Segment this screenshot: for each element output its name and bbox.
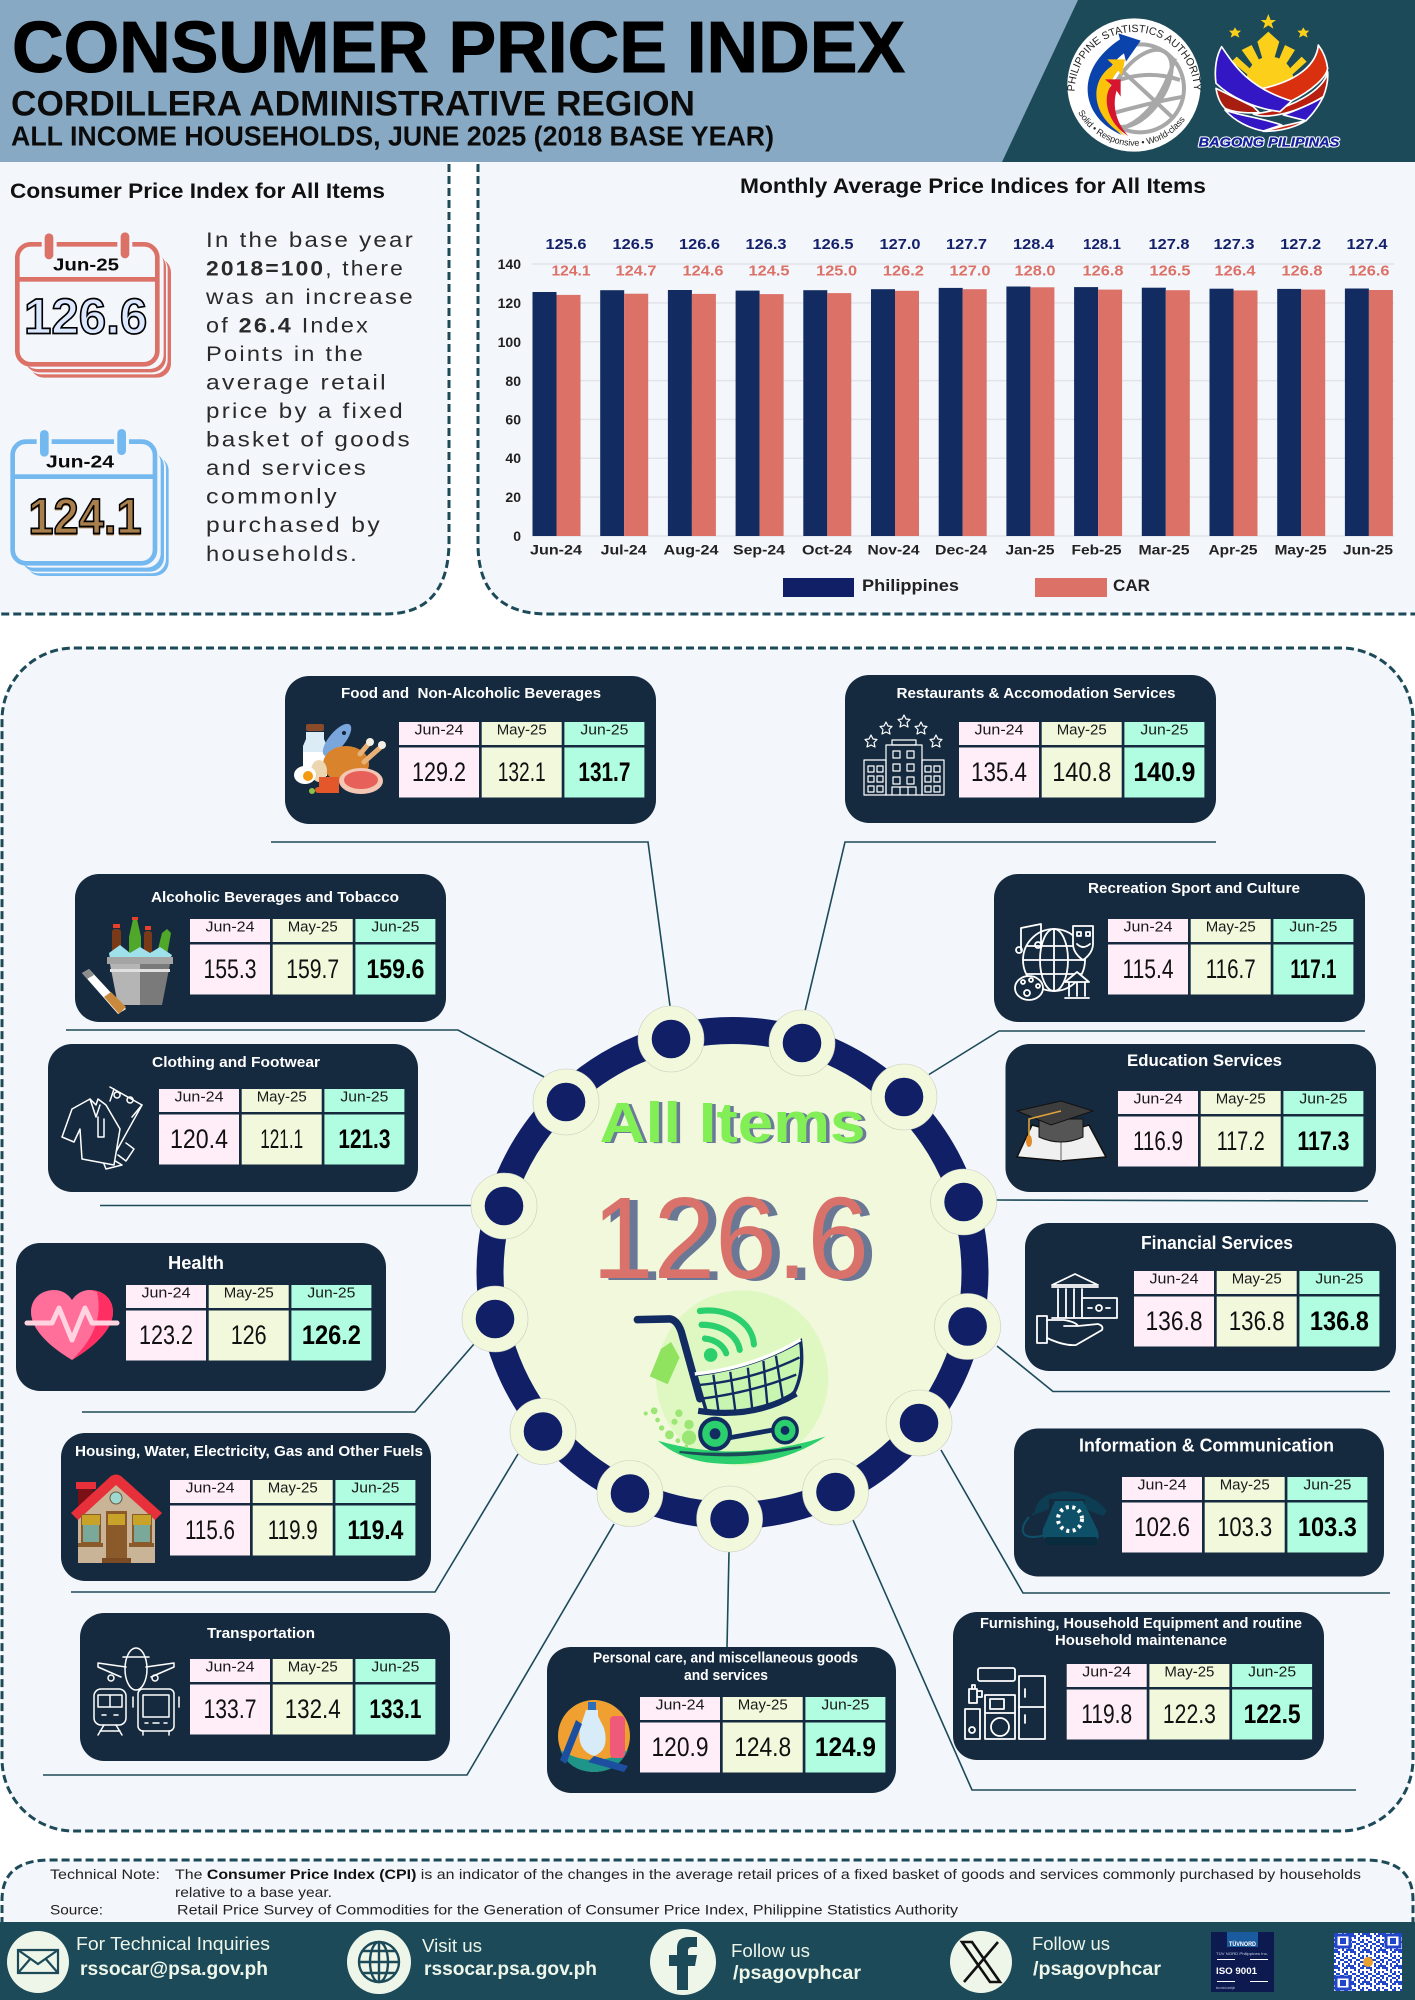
icon: bottles and cigarette xyxy=(82,917,173,1014)
panel: monthly average price indices xyxy=(478,162,1415,614)
technical note text: The Consumer Price Index (CPI) is an indicator of the changes in the average retail prices of a fixed basket of goods and services commonly purchased by households xyxy=(175,1866,1361,1882)
card title: Alcoholic Beverages and Tobacco xyxy=(151,889,399,906)
technical note text: relative to a base year. xyxy=(175,1884,332,1900)
icon: bank and hand xyxy=(1037,1274,1117,1345)
contact: X: Follow us xyxy=(1032,1934,1110,1954)
bar chart: 126.6 xyxy=(679,236,720,253)
data table: 133.1 xyxy=(369,1694,421,1724)
bar chart: Jun-25 xyxy=(1343,542,1393,558)
data table: 159.7 xyxy=(286,954,339,984)
data table: 126 xyxy=(231,1320,267,1350)
icon: calendar Jun-24: Jun-24 xyxy=(46,451,114,471)
data table: 136.8 xyxy=(1146,1306,1202,1336)
bar chart: 127.3 xyxy=(1214,236,1254,253)
data table: May-25 xyxy=(1206,918,1256,936)
data table: 136.8 xyxy=(1229,1306,1285,1336)
data table: 140.9 xyxy=(1133,757,1195,787)
footer bar xyxy=(0,1922,1415,2000)
logo: Bagong Pilipinas xyxy=(1199,14,1339,150)
bar chart: 127.8 xyxy=(1148,236,1190,253)
badge: ISO 9001 xyxy=(1211,1932,1274,1992)
text block: base year explanation: purchased by xyxy=(206,514,382,537)
data table: May-25 xyxy=(288,918,338,936)
data table: Jun-24 xyxy=(1138,1476,1186,1494)
data table: Jun-24 xyxy=(1124,918,1172,936)
contact: technical inquiries: For Technical Inquiries xyxy=(76,1934,270,1954)
chart legend: CAR xyxy=(1113,576,1150,595)
data table: 132.1 xyxy=(498,757,546,787)
data table: 119.4 xyxy=(347,1515,403,1545)
bar chart: 124.7 xyxy=(616,262,656,280)
icon: calendar Jun-24 xyxy=(13,429,169,576)
data table: Jun-25 xyxy=(1140,722,1188,738)
contact: X: /psagovphcar xyxy=(1033,1959,1162,1980)
panel: consumer price index for all items xyxy=(0,162,449,614)
bar chart: 124.6 xyxy=(682,262,724,280)
data table: 121.1 xyxy=(260,1124,303,1154)
bar chart: 80 xyxy=(505,373,521,389)
data table: 136.8 xyxy=(1310,1306,1369,1336)
data table: 122.3 xyxy=(1163,1699,1216,1729)
data table: May-25 xyxy=(1216,1090,1266,1108)
card: transportation xyxy=(80,1613,450,1761)
logo: Bagong Pilipinas: BAGONG PILIPINAS xyxy=(1199,135,1339,150)
data table: Jun-24 xyxy=(206,1658,254,1676)
heading: all items: All Items xyxy=(603,1092,869,1156)
data table: May-25 xyxy=(1164,1664,1214,1680)
data table: May-25 xyxy=(288,1658,338,1676)
technical note text: Technical Note: xyxy=(50,1866,160,1882)
icon: shopping cart xyxy=(637,1290,828,1466)
contact: website: Visit us xyxy=(422,1936,482,1956)
data table: May-25 xyxy=(1232,1270,1282,1288)
source text: Retail Price Survey of Commodities for the Generation of Consumer Price Index, Philippine Statistics Authority xyxy=(177,1902,958,1918)
data table: 116.7 xyxy=(1206,954,1256,984)
bar chart: 125.6 xyxy=(546,236,586,253)
data table: May-25 xyxy=(738,1696,788,1714)
card title: Transportation xyxy=(207,1625,315,1642)
bar chart: 127.2 xyxy=(1280,236,1321,253)
contact: facebook: Follow us xyxy=(731,1941,810,1961)
data table: Jun-24 xyxy=(174,1088,224,1106)
card title xyxy=(593,1650,858,1684)
card title: Restaurants & Accomodation Services xyxy=(896,685,1176,702)
bar chart: 128.4 xyxy=(1013,236,1055,253)
data table: 119.8 xyxy=(1081,1699,1132,1729)
card: health xyxy=(16,1243,386,1391)
data table: 123.2 xyxy=(139,1320,193,1350)
bar chart: Mar-25 xyxy=(1138,542,1190,558)
data table: May-25 xyxy=(257,1088,307,1106)
data table: Jun-25 xyxy=(580,722,628,738)
icon: rotary telephone xyxy=(1023,1491,1107,1545)
bar chart: Aug-24 xyxy=(664,542,719,558)
icon: personal care xyxy=(558,1700,630,1772)
data table: 124.8 xyxy=(734,1732,791,1762)
bar chart: 126.6 xyxy=(1348,262,1390,280)
subtitle: households and period: ALL INCOME HOUSEHOLDS, JUNE 2025 (2018 BASE YEAR) xyxy=(11,120,774,152)
data table: 119.9 xyxy=(268,1515,318,1545)
data table xyxy=(1108,918,1353,994)
icon: graduation cap on book xyxy=(1017,1101,1106,1161)
data table: 129.2 xyxy=(412,757,466,787)
contact: facebook xyxy=(650,1929,862,1995)
contact: X xyxy=(950,1931,1162,1993)
logo: Philippine Statistics Authority xyxy=(1067,18,1202,152)
card title: Health xyxy=(168,1253,224,1273)
data table xyxy=(170,1480,415,1556)
data table: Jun-25 xyxy=(1303,1476,1351,1494)
bar chart xyxy=(498,236,1394,558)
data table xyxy=(640,1696,885,1772)
bar chart: 127.0 xyxy=(950,262,990,280)
data table xyxy=(159,1088,404,1164)
data table: Jun-25 xyxy=(1299,1090,1347,1108)
data table: Jun-25 xyxy=(821,1696,869,1714)
text block: base year explanation: Points in the xyxy=(206,343,365,366)
card title: Recreation Sport and Culture xyxy=(1088,880,1300,897)
logo: Bagong Pilipinas: BAGONG PILIPINAS xyxy=(1199,135,1339,150)
data table: Jun-24 xyxy=(186,1480,234,1496)
bar chart: Sep-24 xyxy=(733,542,785,558)
card: financial services xyxy=(1025,1223,1396,1371)
card: information and communication xyxy=(1014,1428,1384,1576)
contact: technical inquiries xyxy=(7,1931,270,1993)
text block: base year explanation xyxy=(205,229,415,566)
text block: base year explanation: In the base year xyxy=(206,229,415,252)
card title xyxy=(980,1615,1302,1649)
bar chart: Feb-25 xyxy=(1072,542,1122,558)
data table: May-25 xyxy=(1220,1476,1270,1494)
badge: ISO 9001: ISO 9001 xyxy=(1216,1966,1257,1976)
logo: Philippine Statistics Authority: PHILIPPINE STATISTICS AUTHORITY xyxy=(1067,24,1202,91)
data table xyxy=(399,722,644,798)
data table xyxy=(126,1284,371,1360)
header banner xyxy=(0,0,1415,162)
headline value: 126.6 xyxy=(600,1175,877,1305)
data table: Jun-25 xyxy=(371,1658,419,1676)
data table: May-25 xyxy=(497,722,547,738)
card title: Information & Communication xyxy=(1079,1436,1334,1456)
data table: Jun-24 xyxy=(142,1284,190,1302)
text block: base year explanation: price by a fixed xyxy=(206,400,405,423)
text block: base year explanation: average retail xyxy=(206,372,388,394)
data table: 117.1 xyxy=(1290,954,1336,984)
data table xyxy=(190,918,435,994)
data table: Jun-24 xyxy=(974,722,1024,738)
data table xyxy=(959,722,1204,798)
icon: calendar Jun-25 xyxy=(17,232,171,378)
data table: 120.9 xyxy=(652,1732,708,1762)
card: education services xyxy=(1006,1044,1376,1192)
badge: ISO 9001: TÜVNORD xyxy=(1229,1941,1257,1948)
card: food and non-alcoholic beverages xyxy=(285,676,656,824)
bar chart: 40 xyxy=(505,450,521,466)
data table xyxy=(1134,1270,1379,1346)
data table: 117.3 xyxy=(1297,1126,1349,1156)
bar chart: 60 xyxy=(505,412,521,428)
bar chart: 127.4 xyxy=(1346,236,1388,253)
bar chart: 126.5 xyxy=(812,236,854,253)
data table: Jun-25 xyxy=(371,918,419,936)
icon: calendar Jun-24: 124.1 xyxy=(28,490,142,546)
data table: Jun-24 xyxy=(1150,1270,1198,1288)
bar chart: 126.4 xyxy=(1214,262,1256,280)
heading: consumer price index for all items: Consumer Price Index for All Items xyxy=(10,180,385,203)
bar chart: Jun-24 xyxy=(530,542,582,558)
card title: Financial Services xyxy=(1141,1233,1293,1253)
bar chart: Jul-24 xyxy=(601,542,647,558)
data table: 140.8 xyxy=(1052,757,1111,787)
card title: Household maintenance xyxy=(1055,1632,1227,1649)
data table: Jun-25 xyxy=(340,1088,388,1106)
card title: Furnishing, Household Equipment and routine xyxy=(980,1615,1302,1632)
bar chart: 126.2 xyxy=(883,262,924,280)
text block: base year explanation: basket of goods xyxy=(206,428,412,452)
card: clothing and footwear xyxy=(48,1044,418,1192)
bar chart: Nov-24 xyxy=(868,542,920,558)
icon: plane, train, bus xyxy=(94,1648,179,1735)
data table: Jun-24 xyxy=(656,1696,704,1714)
bar chart: 0 xyxy=(513,528,521,544)
connector lines xyxy=(43,842,1390,1790)
data table: Jun-24 xyxy=(206,918,254,936)
data table: 116.9 xyxy=(1133,1126,1183,1156)
data table: May-25 xyxy=(1057,722,1107,738)
data table: Jun-24 xyxy=(1134,1090,1182,1108)
panel: technical note xyxy=(2,1860,1413,1925)
data table: Jun-25 xyxy=(1315,1270,1363,1288)
data table: Jun-25 xyxy=(1289,918,1337,936)
data table xyxy=(1118,1090,1363,1166)
text block: base year explanation: and services xyxy=(206,457,368,480)
data table: 132.4 xyxy=(285,1694,341,1724)
card: alcoholic beverages and tobacco xyxy=(75,874,446,1022)
icon: clothes xyxy=(62,1087,142,1169)
icon: food xyxy=(294,720,386,794)
chart legend xyxy=(783,576,1150,597)
bar chart: 128.1 xyxy=(1083,236,1121,253)
bar chart: Oct-24 xyxy=(802,542,852,558)
data table: 131.7 xyxy=(578,757,630,787)
contact: website: rssocar.psa.gov.ph xyxy=(424,1959,597,1980)
card: furnishing, household equipment and routine household maintenance xyxy=(953,1612,1324,1760)
logo: Philippine Statistics Authority: Solid • Responsive • World-class xyxy=(1078,110,1184,146)
data table: Jun-25 xyxy=(351,1480,399,1496)
data table xyxy=(190,1658,435,1734)
bar chart: 124.1 xyxy=(552,262,590,280)
data table: 124.9 xyxy=(815,1732,876,1762)
data table: May-25 xyxy=(268,1480,318,1496)
card title: Clothing and Footwear xyxy=(152,1054,320,1071)
data table: 102.6 xyxy=(1134,1512,1190,1542)
bar chart: 126.3 xyxy=(746,236,786,253)
text block: base year explanation: was an increase xyxy=(205,286,415,309)
bar chart: 126.8 xyxy=(1082,262,1124,280)
data table: May-25 xyxy=(224,1284,274,1302)
badge: ISO 9001: TÜV NORD Philippines Inc. xyxy=(1216,1951,1268,1956)
card title: Food and Non-Alcoholic Beverages xyxy=(341,685,601,702)
card title: and services xyxy=(684,1667,768,1684)
data table: 159.6 xyxy=(366,954,424,984)
icon: appliances xyxy=(965,1668,1045,1739)
title: CONSUMER PRICE INDEX xyxy=(12,8,905,88)
data table xyxy=(1122,1476,1367,1552)
badge: ISO 9001: tuv-nord.com/ph xyxy=(1216,1986,1235,1990)
text block: base year explanation: commonly xyxy=(206,486,339,508)
bar chart: 124.5 xyxy=(748,262,790,280)
bar chart: 128.0 xyxy=(1014,262,1056,280)
data table: Jun-25 xyxy=(307,1284,355,1302)
panel: commodity groups xyxy=(2,648,1413,1831)
icon: recreation xyxy=(1015,924,1093,1000)
icon: calendar Jun-25: 126.6 xyxy=(24,288,147,344)
text block: base year explanation: of 26.4 Index xyxy=(206,314,370,338)
bar chart: 126.8 xyxy=(1282,262,1322,280)
icon: calendar Jun-25: Jun-25 xyxy=(53,254,119,274)
data table xyxy=(1067,1664,1312,1740)
card: recreation sport and culture xyxy=(994,874,1365,1022)
source text: Source: xyxy=(50,1902,103,1918)
subtitle: region: CORDILLERA ADMINISTRATIVE REGION xyxy=(11,84,695,124)
card: restaurants and accommodation services xyxy=(845,675,1216,823)
card title: Personal care, and miscellaneous goods xyxy=(593,1650,858,1667)
data table: 117.2 xyxy=(1217,1126,1265,1156)
bar chart: Dec-24 xyxy=(935,542,987,558)
QR code xyxy=(1334,1933,1402,1991)
bar chart: 140 xyxy=(498,256,521,272)
data table: 122.5 xyxy=(1244,1699,1301,1729)
data table: 126.2 xyxy=(302,1320,361,1350)
data table: 115.6 xyxy=(185,1515,235,1545)
data table: 155.3 xyxy=(204,954,256,984)
data table: Jun-25 xyxy=(1248,1664,1296,1680)
ring nodes xyxy=(462,1006,1001,1552)
icon: heart xyxy=(27,1290,117,1360)
contact: website xyxy=(347,1930,597,1994)
headline value: 126.6 xyxy=(592,1173,869,1303)
bar chart: 125.0 xyxy=(816,262,857,280)
bar chart: 120 xyxy=(498,295,521,311)
card title: Housing, Water, Electricity, Gas and Other Fuels xyxy=(75,1443,423,1460)
icon: house xyxy=(71,1474,162,1563)
text block: base year explanation: 2018=100 , there xyxy=(206,258,405,280)
technical note text xyxy=(50,1866,1361,1900)
data table: 103.3 xyxy=(1298,1512,1357,1542)
card title: Education Services xyxy=(1127,1051,1282,1070)
chart legend: Philippines xyxy=(862,576,959,595)
bar chart: 20 xyxy=(505,489,521,505)
bar chart: May-25 xyxy=(1275,542,1327,558)
bar chart: Apr-25 xyxy=(1208,542,1258,558)
data table: Jun-24 xyxy=(414,722,464,738)
data table: 120.4 xyxy=(170,1124,228,1154)
bar chart: 126.5 xyxy=(612,236,654,253)
icon: calendar Jun-24: 124.1 xyxy=(28,488,142,544)
icon: hotel xyxy=(864,715,944,795)
card: personal care and miscellaneous goods and services xyxy=(547,1647,896,1793)
bar chart: 127.7 xyxy=(946,236,987,253)
contact: technical inquiries: rssocar@psa.gov.ph xyxy=(80,1959,268,1980)
data table: 103.3 xyxy=(1217,1512,1272,1542)
contact: facebook: /psagovphcar xyxy=(733,1963,862,1984)
data table: 135.4 xyxy=(971,757,1027,787)
data table: 115.4 xyxy=(1122,954,1174,984)
bar chart: Jan-25 xyxy=(1006,542,1055,558)
card: housing, water, electricity, gas and other fuels xyxy=(61,1433,431,1581)
bar chart: 100 xyxy=(498,334,521,350)
data table: 121.3 xyxy=(338,1124,390,1154)
central all items hub xyxy=(462,1006,1001,1552)
bar chart: 126.5 xyxy=(1150,262,1190,280)
data table: 133.7 xyxy=(204,1694,256,1724)
bar chart: 127.0 xyxy=(880,236,920,253)
data table: Jun-24 xyxy=(1082,1664,1131,1680)
text block: base year explanation: households. xyxy=(206,543,359,566)
heading: monthly average price indices: Monthly Average Price Indices for All Items xyxy=(740,175,1206,198)
heading: all items: All Items xyxy=(600,1091,866,1155)
